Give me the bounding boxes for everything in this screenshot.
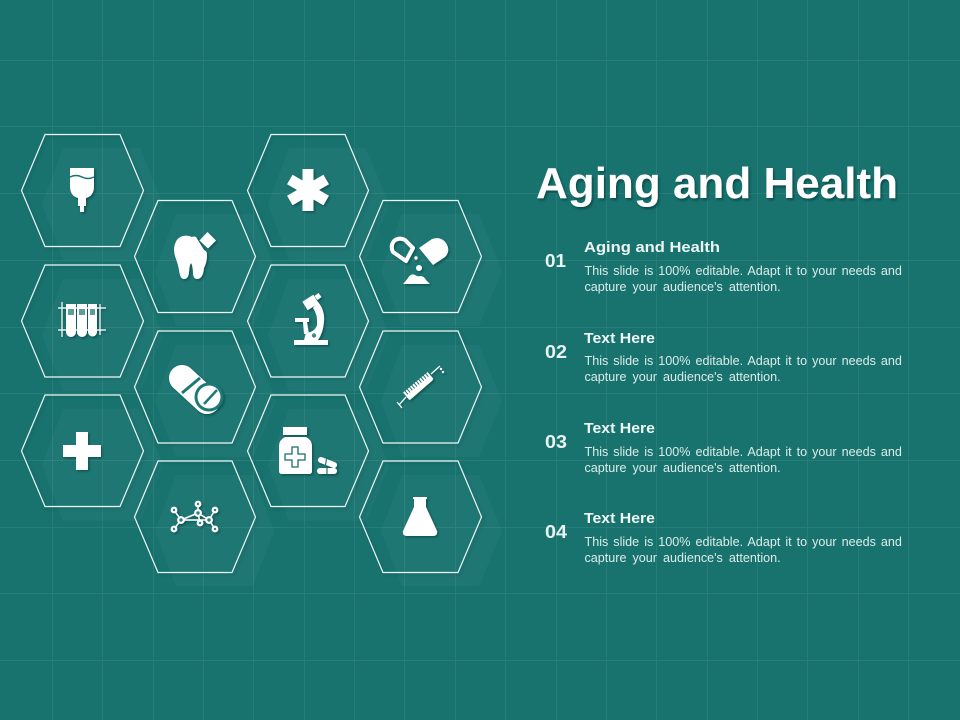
hexagon panel: plus [22,395,163,521]
icon: IV bag [70,168,94,212]
item 01: This slide is 100% editable. Adapt it to your needs and [584,264,902,278]
item 04: Text Here [584,510,655,527]
item 01: Aging and Health [584,239,720,256]
hexagon panel: capsule opening [360,200,502,326]
hexagon panel: molecule [134,461,274,586]
hexagon panel: medicine bottle [248,395,389,521]
hexagon panel: asterisk [248,134,389,260]
icon: microscope [294,295,328,345]
item 03: This slide is 100% editable. Adapt it to your needs and [584,445,902,459]
item 01: 01 [545,251,566,271]
hexagon panel: pill [134,331,276,457]
hexagon panel: syringe [360,331,502,457]
icon: capsule opening [392,238,448,284]
item 04 [545,510,902,565]
item 03: capture your audience's attention. [584,461,781,475]
icon: medicine bottle and pills [279,427,334,474]
item 04: capture your audience's attention. [584,551,781,565]
icon: flask [403,497,437,536]
hexagon panel: IV bag [22,134,163,260]
item 02: capture your audience's attention. [584,370,781,384]
item 03: Text Here [584,420,655,437]
item 03: 03 [545,432,567,452]
item 01 [545,239,902,294]
icon: plus [63,432,101,470]
item 02: This slide is 100% editable. Adapt it to your needs and [584,354,902,368]
title: Aging and Health [536,159,898,208]
item 04: This slide is 100% editable. Adapt it to your needs and [584,535,902,549]
icon: pill and tablet [182,378,224,412]
item 02 [545,330,902,384]
icon: molecule [172,502,217,531]
icon: tooth [174,232,216,279]
icon: syringe [397,366,444,408]
icon: test tubes [58,302,106,337]
item 02: 02 [545,342,567,362]
icon: asterisk [287,169,329,211]
hexagon panel: tooth [134,200,276,326]
hexagon panel: flask [360,461,502,586]
hexagon panel: microscope [248,265,389,391]
item 02: Text Here [584,330,655,347]
item 04: 04 [545,522,567,542]
item 03 [545,420,902,475]
hexagon panel: test tubes [22,265,163,391]
item 01: capture your audience's attention. [584,280,781,294]
